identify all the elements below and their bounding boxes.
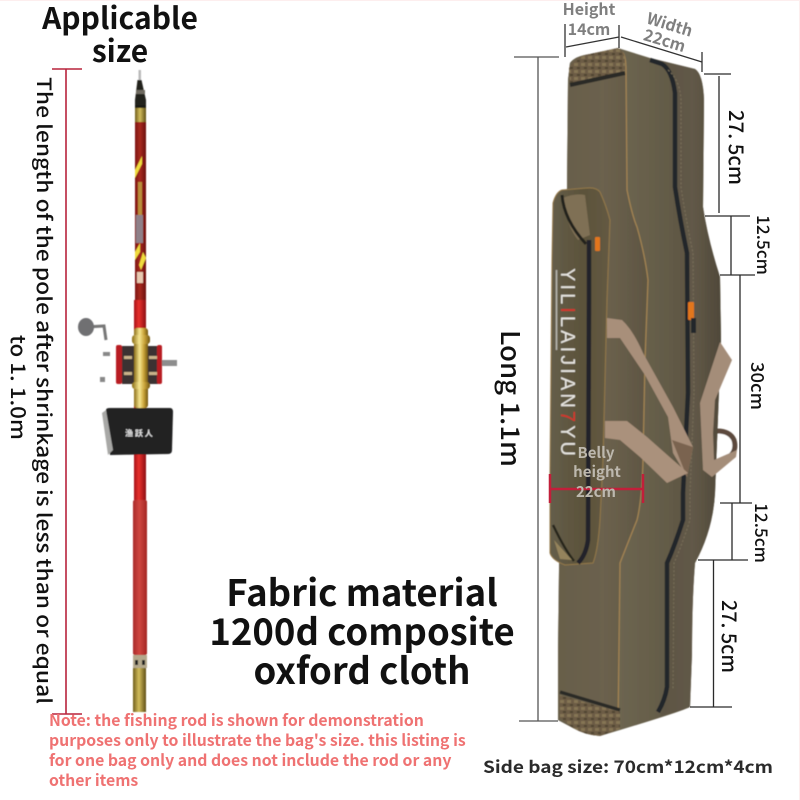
heading: fabric material: oxford cloth	[254, 642, 470, 695]
belly height dimension: Belly	[578, 442, 615, 463]
dark red upper section	[135, 122, 146, 312]
gold butt cap	[133, 655, 147, 712]
bag seam piping	[618, 52, 648, 727]
straps	[605, 318, 737, 483]
red grip	[133, 500, 147, 655]
belly height dimension	[550, 442, 644, 503]
heading: fabric material: Fabric material	[226, 564, 498, 617]
long dimension: Long 1.1m	[493, 330, 530, 467]
note: Note: the fishing rod is shown for demonstration	[49, 708, 424, 731]
bright red middle section	[134, 300, 146, 500]
bag left side panel	[558, 48, 648, 736]
note: purposes only to illustrate the bag's size. this listing is	[49, 728, 466, 751]
red length marker	[52, 69, 82, 714]
zipper stitching	[668, 70, 694, 690]
bottom textured cap	[559, 692, 620, 736]
top textured cap	[569, 48, 625, 85]
width dimension: 22cm	[641, 22, 689, 57]
vertical text: pole length: The length of the pole after shrinkage is less than or equal	[31, 77, 60, 704]
bag back handle loop	[717, 431, 735, 456]
segment labels: 27. 5cm	[723, 110, 752, 185]
black rod holder: 渔 跃 人	[125, 428, 153, 439]
bag back panel	[650, 58, 721, 716]
side bag size: Side bag size: 70cm*12cm*4cm	[483, 753, 773, 778]
black rod holder	[102, 408, 173, 455]
height dimension: 14cm	[568, 16, 610, 40]
fishing bag	[550, 48, 737, 736]
back zipper pull	[688, 302, 696, 333]
note: other items	[49, 768, 138, 791]
width dimension: Width	[644, 5, 696, 42]
width dimension	[621, 5, 702, 72]
heading: applicable size: size	[92, 27, 148, 71]
heading: fabric material: 1200d composite	[209, 603, 515, 656]
heading: fabric material	[209, 564, 515, 695]
segment labels	[716, 110, 776, 673]
segment labels: 27. 5cm	[716, 600, 745, 673]
segment labels: 12.5cm	[749, 503, 774, 563]
main zipper	[650, 60, 688, 712]
belly height dimension: height	[573, 461, 622, 482]
right strap	[700, 342, 737, 477]
front pocket	[550, 188, 610, 565]
fishing rod	[78, 70, 177, 712]
note: for one bag only and does not include the rod or any	[49, 748, 451, 771]
segment labels: 30cm	[745, 362, 771, 410]
height dimension	[563, 0, 619, 57]
note	[49, 708, 466, 791]
lower strap	[605, 421, 688, 483]
reel	[78, 318, 177, 384]
gold reel seat	[132, 328, 150, 408]
pocket zipper pull	[595, 237, 600, 251]
vertical text: pole length	[5, 77, 60, 704]
bag main body	[558, 48, 721, 736]
segment labels: 12.5cm	[751, 215, 776, 275]
right side dimension lines	[690, 74, 755, 707]
heading: applicable size	[41, 0, 198, 71]
upper strap	[607, 318, 693, 477]
belly height dimension: 22cm	[576, 481, 616, 502]
rod tip	[135, 70, 146, 122]
brand logo: YIL I LAIJIAN 7 YU	[556, 268, 578, 456]
vertical text: pole length: to 1. 1.0m	[5, 335, 34, 440]
